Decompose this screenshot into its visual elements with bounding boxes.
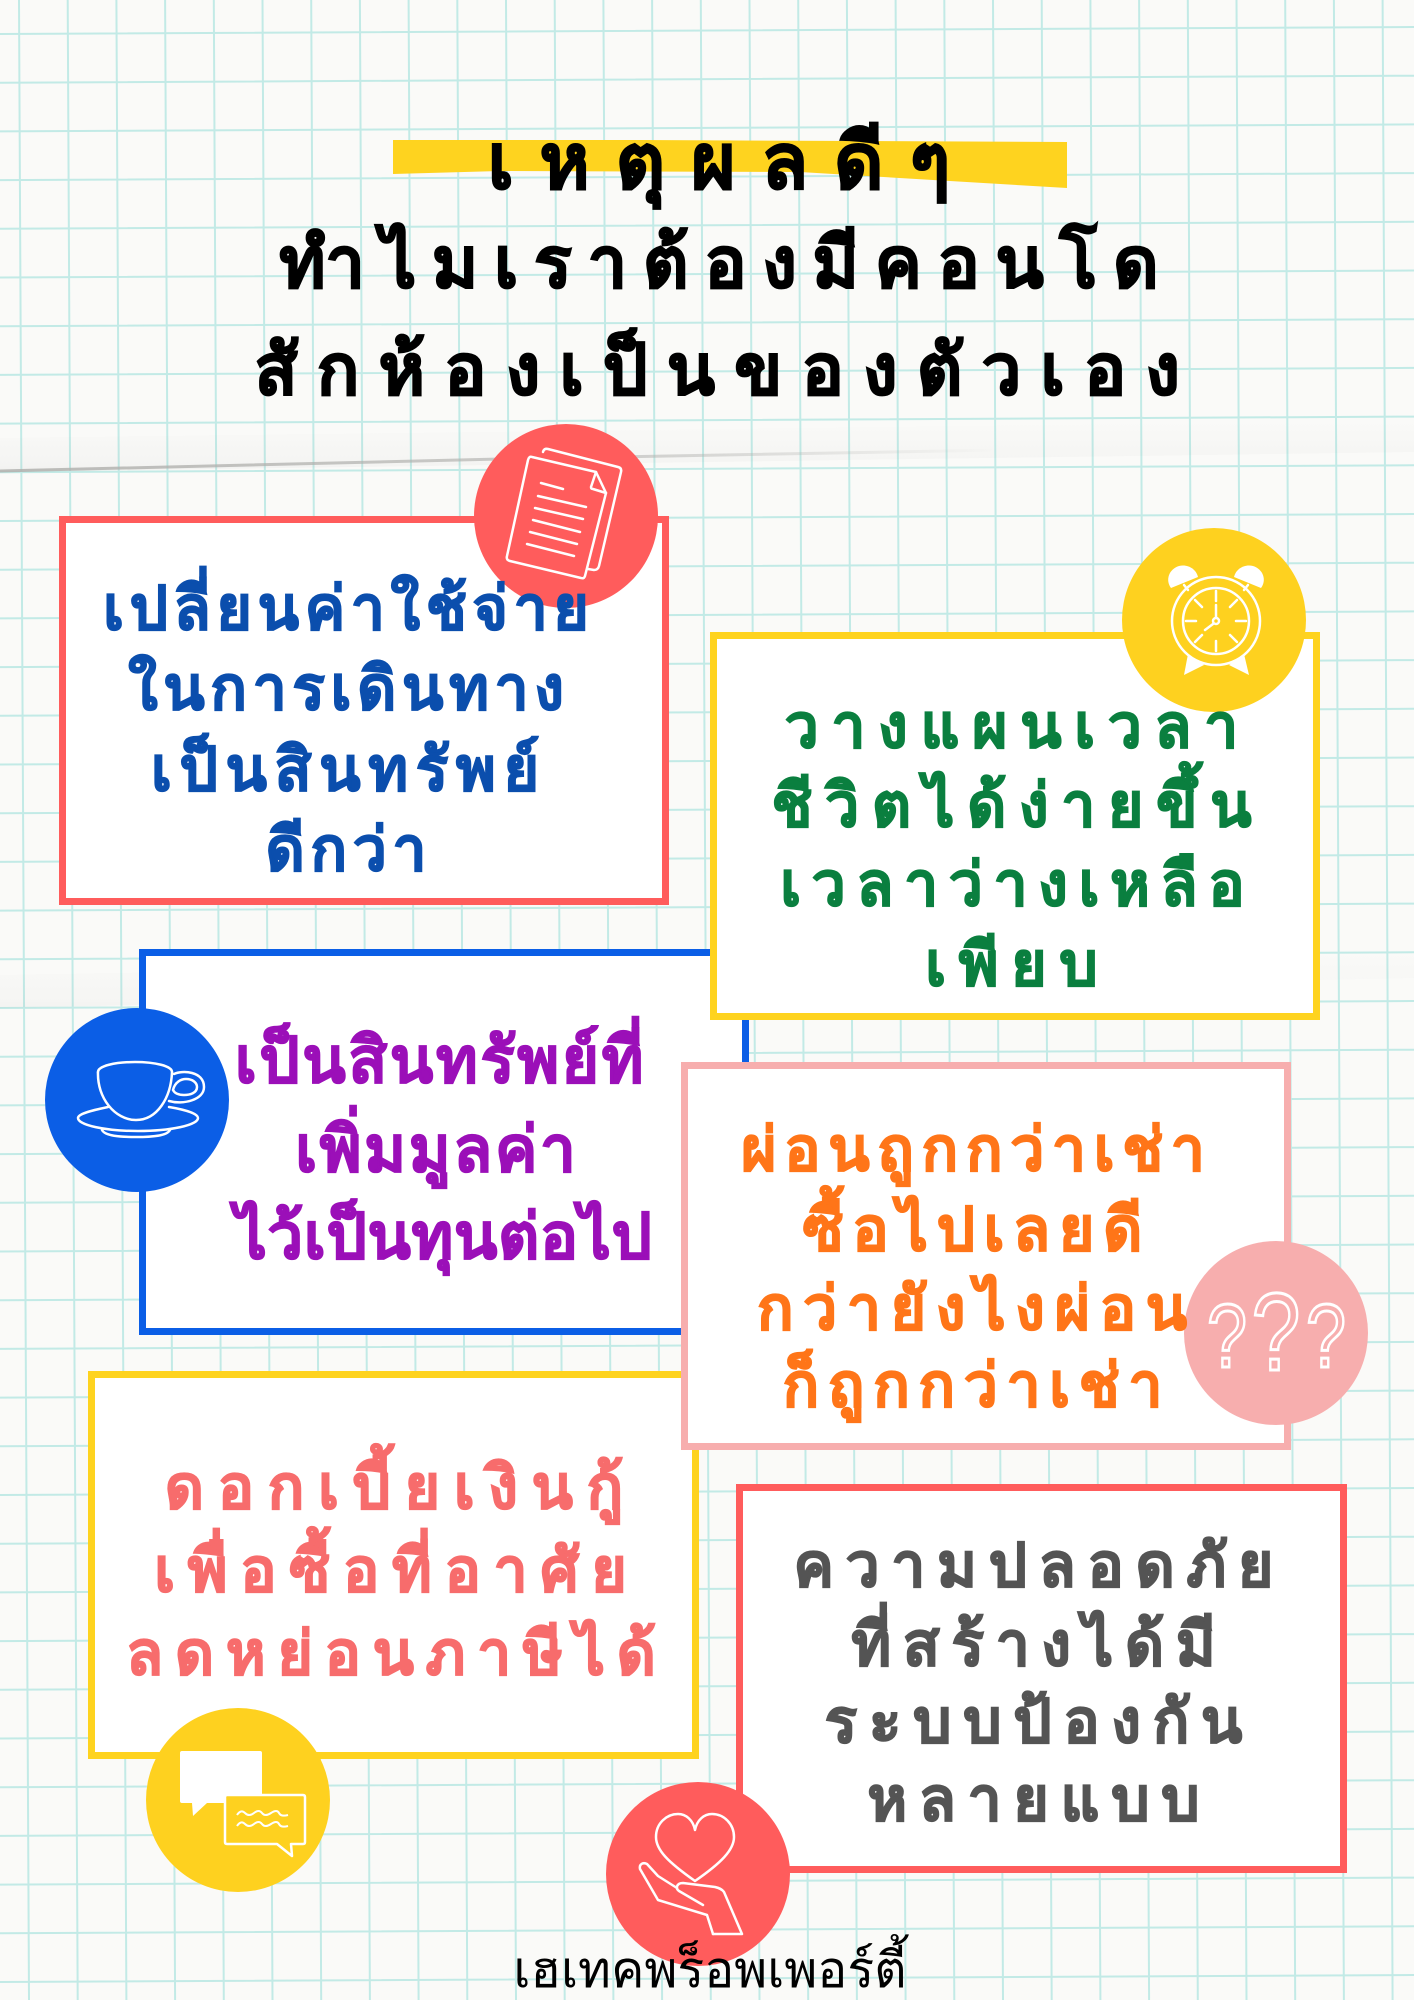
text block: ความปลอดภัย [794,1532,1285,1599]
panel: safety systems [606,1484,1347,1966]
text block [794,1532,1285,1833]
text block: ในการเดินทาง [128,655,570,722]
text block: ชีวิตได้ง่ายขึ้น [772,772,1264,839]
text block [103,566,595,883]
icon: question marks [1184,1241,1368,1425]
text block: กว่ายังไงผ่อน [757,1275,1197,1342]
box frame [59,516,669,905]
icon: documents [474,424,658,608]
box frame [139,949,749,1335]
text block: เป็นสินทรัพย์ [151,736,547,803]
panel: cheaper than renting [681,1062,1368,1450]
box frame [710,632,1320,1020]
text block: เพื่อซื้อที่อาศัย [154,1537,640,1604]
text block: เวลาว่างเหลือ [780,851,1256,918]
text block: ลดหย่อนภาษีได้ [126,1620,668,1687]
text block: เปลี่ยนค่าใช้จ่าย [103,575,595,642]
text block: ระบบป้องกัน [825,1688,1254,1755]
text block [772,693,1264,998]
icon: question marks: ? [1252,1272,1300,1394]
text block: เพียบ [925,931,1111,998]
icon: heart in hand [606,1782,790,1966]
text block: ดอกเบี้ยเงินกู้ [165,1454,637,1521]
text block: วางแผนเวลา [785,693,1251,760]
title line 3: สักห้องเป็นของตัวเอง [255,331,1199,409]
text block: ก็ถูกกว่าเช่า [783,1352,1171,1419]
icon: speech bubbles [146,1708,330,1892]
footer credit: เฮเทคพร็อพเพอร์ตี้ [513,1942,907,1998]
title line 1: เหตุผลดีๆ [488,120,976,205]
text block: เพิ่มมูลค่า [295,1115,579,1185]
text block [228,1016,653,1276]
text block: ที่สร้างได้มี [851,1611,1228,1678]
panel: mortgage interest tax deduction [88,1371,699,1892]
panel: convert travel cost into asset [59,424,669,905]
text block: ผ่อนถูกกว่าเช่า [741,1116,1213,1183]
text block [126,1442,668,1687]
title highlight stroke [393,140,1067,188]
panel: asset that grows in value [45,949,749,1335]
text block: เป็นสินทรัพย์ที่ [235,1026,646,1096]
text block: หลายแบบ [867,1766,1212,1833]
title line 2: ทำไมเราต้องมีคอนโด [279,224,1175,302]
panel: easier life planning [710,528,1320,1020]
text block: ซื้อไปเลยดี [803,1196,1151,1263]
box frame [681,1062,1291,1450]
icon: question marks: ? [1207,1286,1247,1387]
text block: ดีกว่า [266,816,432,883]
icon: alarm clock [1122,528,1306,712]
text block [741,1116,1213,1424]
icon: question marks: ? [1306,1286,1346,1387]
text block: ไว้เป็นทุนต่อไป [235,1202,653,1272]
box frame [736,1484,1347,1873]
title block [255,120,1199,409]
box frame [88,1371,699,1759]
icon: coffee cup [45,1008,229,1192]
